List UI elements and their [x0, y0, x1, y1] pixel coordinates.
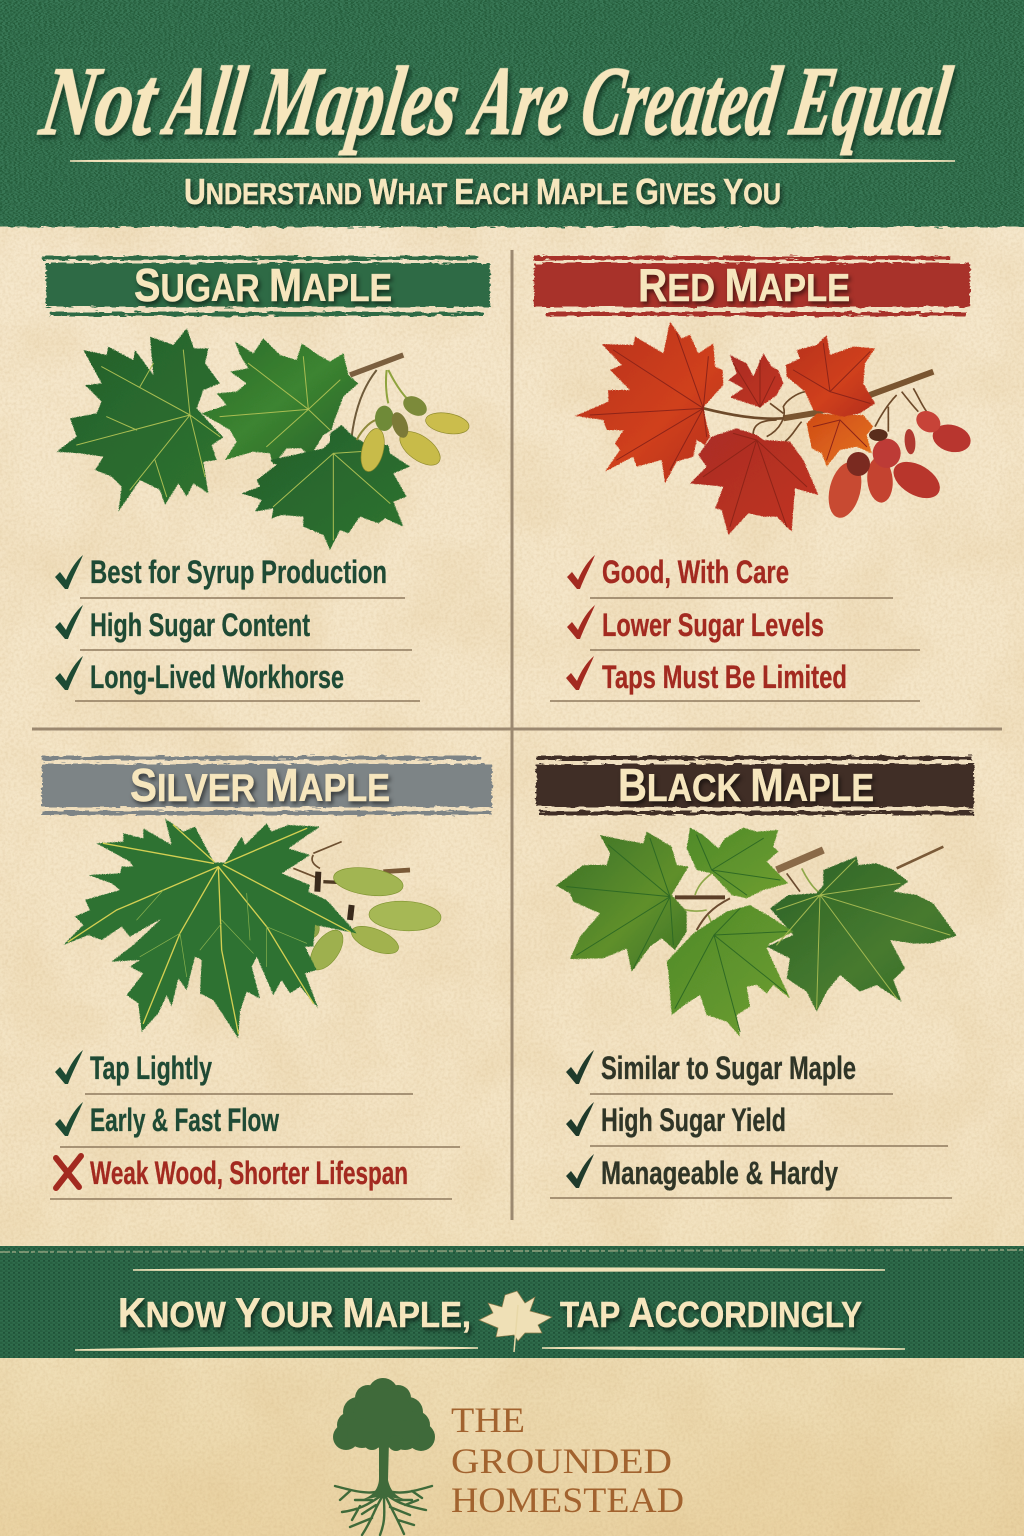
black maple list: High Sugar Yield [601, 1102, 786, 1138]
black maple banner [536, 756, 974, 815]
black maple list [550, 1050, 952, 1198]
red maple list: Taps Must Be Limited [602, 659, 847, 695]
panel: silver maple [42, 756, 492, 1199]
sugar maple list: Long-Lived Workhorse [90, 659, 344, 695]
title: Not [34, 48, 166, 156]
silver maple banner [42, 756, 492, 815]
footer slogan [118, 1289, 862, 1336]
silver maple list: Weak Wood, Shorter Lifespan [90, 1155, 408, 1191]
subtitle: UNDERSTAND WHAT EACH MAPLE GIVES YOU [184, 171, 781, 212]
red maple list: Good, With Care [602, 554, 789, 590]
sugar maple banner: SUGAR MAPLE [134, 259, 392, 311]
red maple list [550, 554, 920, 701]
footer banner [0, 1246, 1024, 1358]
title: All [156, 48, 253, 156]
logo wordmark [451, 1400, 684, 1520]
logo wordmark: GROUNDED [451, 1441, 672, 1481]
panel: black maple [536, 756, 974, 1198]
logo: the grounded homestead [333, 1378, 684, 1535]
silver maple banner: SILVER MAPLE [130, 759, 390, 811]
header background [0, 0, 1024, 227]
black maple banner: BLACK MAPLE [618, 759, 874, 811]
black maple list: Manageable & Hardy [601, 1155, 838, 1191]
footer slogan: TAP ACCORDINGLY [560, 1289, 862, 1336]
logo wordmark: THE [451, 1400, 525, 1440]
icon: tree with roots [333, 1378, 435, 1535]
title: Are [462, 48, 577, 156]
panel: red maple [534, 256, 974, 701]
panel: sugar maple [42, 256, 490, 701]
sugar maple leaves [57, 328, 471, 550]
title: Created [575, 48, 788, 156]
sugar maple banner [42, 256, 490, 316]
red maple banner [534, 256, 970, 316]
red maple banner: RED MAPLE [638, 259, 850, 311]
title [34, 48, 958, 156]
sugar maple list [55, 554, 420, 701]
silver maple list: Early & Fast Flow [90, 1102, 279, 1138]
logo wordmark: HOMESTEAD [451, 1480, 684, 1520]
footer slogan: KNOW YOUR MAPLE, [118, 1289, 471, 1336]
red maple leaves [575, 322, 974, 535]
sugar maple list: Best for Syrup Production [90, 554, 387, 590]
icon: cream maple leaf [479, 1291, 552, 1352]
silver maple list: Tap Lightly [90, 1050, 212, 1086]
icon: red x [56, 1156, 81, 1188]
silver maple leaves [63, 818, 442, 1038]
black maple leaves [556, 828, 957, 1037]
sugar maple list: High Sugar Content [90, 607, 310, 643]
title: Maples [250, 48, 467, 156]
red maple list: Lower Sugar Levels [602, 607, 824, 643]
black maple list: Similar to Sugar Maple [601, 1050, 856, 1086]
silver maple list [50, 1050, 460, 1199]
header banner [0, 0, 1024, 227]
